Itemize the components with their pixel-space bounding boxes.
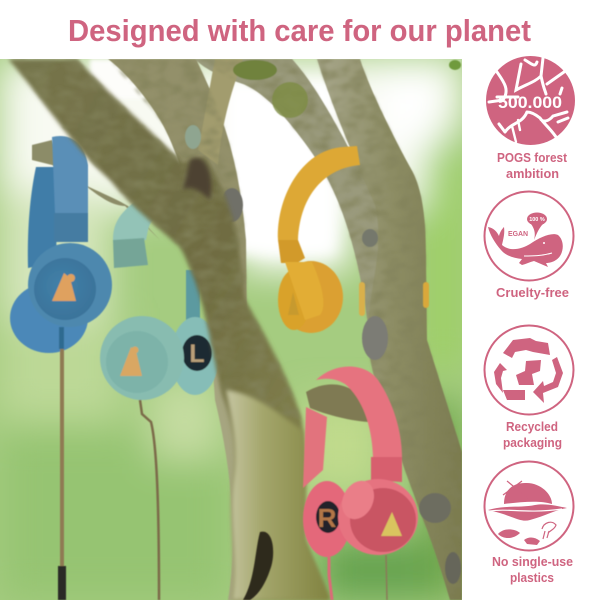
label: Recycled packaging <box>503 420 562 450</box>
headphones: pink <box>303 366 418 600</box>
tree branches, background <box>32 59 462 600</box>
logo <box>120 347 142 376</box>
cup <box>28 243 112 327</box>
foreground branch <box>8 59 330 600</box>
cables <box>329 555 387 600</box>
label: No single-use plastics: plastics <box>510 571 554 585</box>
label: POGS forest ambition: POGS forest <box>497 151 568 165</box>
front band <box>112 204 152 240</box>
back cup behind trunk <box>359 282 429 316</box>
icon: vegan whale <box>484 192 574 280</box>
title: Designed with care for our planet <box>68 13 531 48</box>
back band and cup <box>10 167 88 353</box>
headphones: yellow <box>278 146 429 333</box>
cup <box>100 316 184 400</box>
label: Recycled packaging: packaging <box>503 436 562 450</box>
back cup: L <box>189 340 205 368</box>
label: POGS forest ambition: ambition <box>506 167 559 181</box>
icon: no single-use plastics <box>484 462 574 550</box>
back cup <box>176 270 218 396</box>
label: No single-use plastics <box>492 555 573 585</box>
photo: headphones hanging in tree <box>0 59 462 600</box>
logo <box>381 512 402 536</box>
back cup <box>303 481 351 557</box>
label: Recycled packaging: Recycled <box>506 420 558 434</box>
band <box>316 366 402 457</box>
headphones: teal <box>100 198 219 600</box>
cup <box>338 479 418 555</box>
label: POGS forest ambition <box>497 151 568 181</box>
cable <box>140 400 159 600</box>
icon: recycled packaging <box>484 326 574 414</box>
back cup: R <box>318 503 337 533</box>
blurred green background <box>0 59 462 600</box>
label: Cruelty-free: Cruelty-free <box>496 286 569 300</box>
logo <box>52 273 76 301</box>
label: No single-use plastics: No single-use <box>492 555 573 569</box>
front band <box>52 136 88 213</box>
spout with 100 %: 100 % <box>529 217 545 223</box>
logo <box>288 294 298 315</box>
cup <box>279 261 343 333</box>
back band <box>303 407 327 488</box>
stub branch <box>306 384 368 422</box>
icon: forest 500.000: 500.000 <box>498 93 562 112</box>
icon: vegan whale: EGAN <box>508 231 528 238</box>
headphones: blue <box>10 136 112 600</box>
icon: forest 500.000 <box>486 56 575 145</box>
band <box>278 146 360 240</box>
cable <box>58 327 66 600</box>
